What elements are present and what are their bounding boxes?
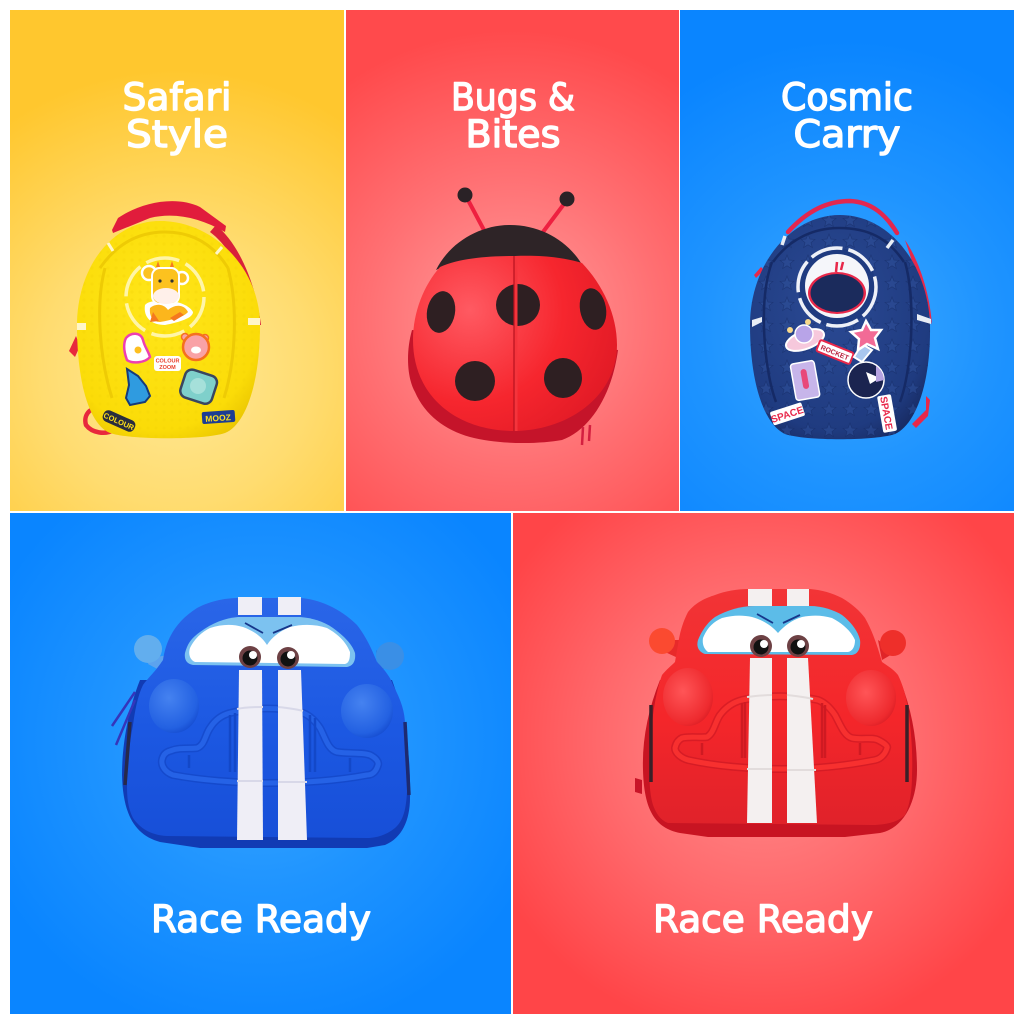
shell	[413, 256, 617, 431]
sticker: Colour Zoom	[154, 356, 181, 371]
red car backpack	[635, 589, 917, 837]
badge: Zoom	[202, 410, 235, 424]
stripes	[747, 589, 817, 823]
headlights	[663, 668, 896, 726]
badge: Colour: COLOUR	[102, 411, 136, 432]
yellow backpack	[69, 201, 261, 438]
head	[436, 225, 584, 270]
heading: Cosmic Carry: Cosmic	[781, 76, 913, 119]
heading: Safari Style: Safari	[122, 76, 232, 119]
heading: Race Ready red: Race Ready	[653, 898, 873, 941]
grille	[162, 708, 378, 783]
lower shell	[122, 680, 410, 848]
sticker: elephant	[178, 368, 219, 406]
heading: Bugs & Bites: Bites	[466, 113, 560, 156]
sticker: Rocket label	[816, 340, 854, 364]
badge: Zoom: MOOZ	[205, 412, 231, 424]
mirrors	[649, 628, 906, 660]
heading: Cosmic Carry: Carry	[794, 113, 900, 156]
heading: Bugs & Bites	[451, 76, 575, 156]
shell	[750, 215, 930, 439]
ladybug backpack	[408, 188, 618, 445]
sticker: Colour Zoom: COLOUR	[156, 358, 179, 364]
spots	[424, 284, 609, 401]
sticker: chicken	[124, 334, 150, 362]
helmet	[805, 254, 869, 318]
handle	[788, 201, 897, 233]
heading: Safari Style	[122, 76, 232, 156]
helmet ring	[798, 248, 876, 326]
headlights	[149, 679, 393, 738]
grille	[675, 696, 887, 769]
navy backpack	[750, 201, 932, 439]
antennae	[458, 188, 574, 232]
heading: Safari Style: Style	[126, 113, 228, 156]
panel: Race Ready red	[513, 513, 1014, 1014]
car body	[650, 589, 912, 825]
sticker: shooting star	[851, 321, 881, 362]
sticker: Space right: SPACE	[877, 396, 894, 431]
zipper	[112, 692, 135, 745]
sticker: round astronaut	[848, 362, 884, 398]
sticker: giraffe	[142, 261, 193, 325]
heading: Cosmic Carry	[781, 76, 913, 156]
sticker: Rocket label: ROCKET	[819, 345, 850, 362]
sticker: blue animal	[126, 369, 150, 405]
panel: Cosmic Carry	[680, 10, 1014, 511]
heading: Race Ready blue: Race Ready	[151, 898, 371, 941]
sticker: Space left: SPACE	[770, 405, 806, 426]
sticker: Colour Zoom: ZOOM	[159, 365, 176, 371]
stripes	[237, 597, 307, 840]
sticker: UFO	[783, 319, 827, 355]
mirrors	[134, 635, 404, 672]
lower shell	[408, 330, 618, 443]
panel: Safari Style	[10, 10, 344, 511]
panel: Bugs & Bites	[346, 10, 679, 511]
car body	[127, 598, 408, 838]
blue car backpack	[112, 597, 410, 848]
side tab	[635, 778, 642, 794]
panel: Race Ready blue	[10, 513, 511, 1014]
windshield	[185, 617, 355, 669]
sticker: rocket card	[790, 360, 820, 401]
lower shell	[643, 680, 917, 837]
sticker: pig	[182, 334, 209, 360]
windshield	[697, 606, 860, 657]
heading: Bugs & Bites: Bugs &	[451, 76, 575, 119]
